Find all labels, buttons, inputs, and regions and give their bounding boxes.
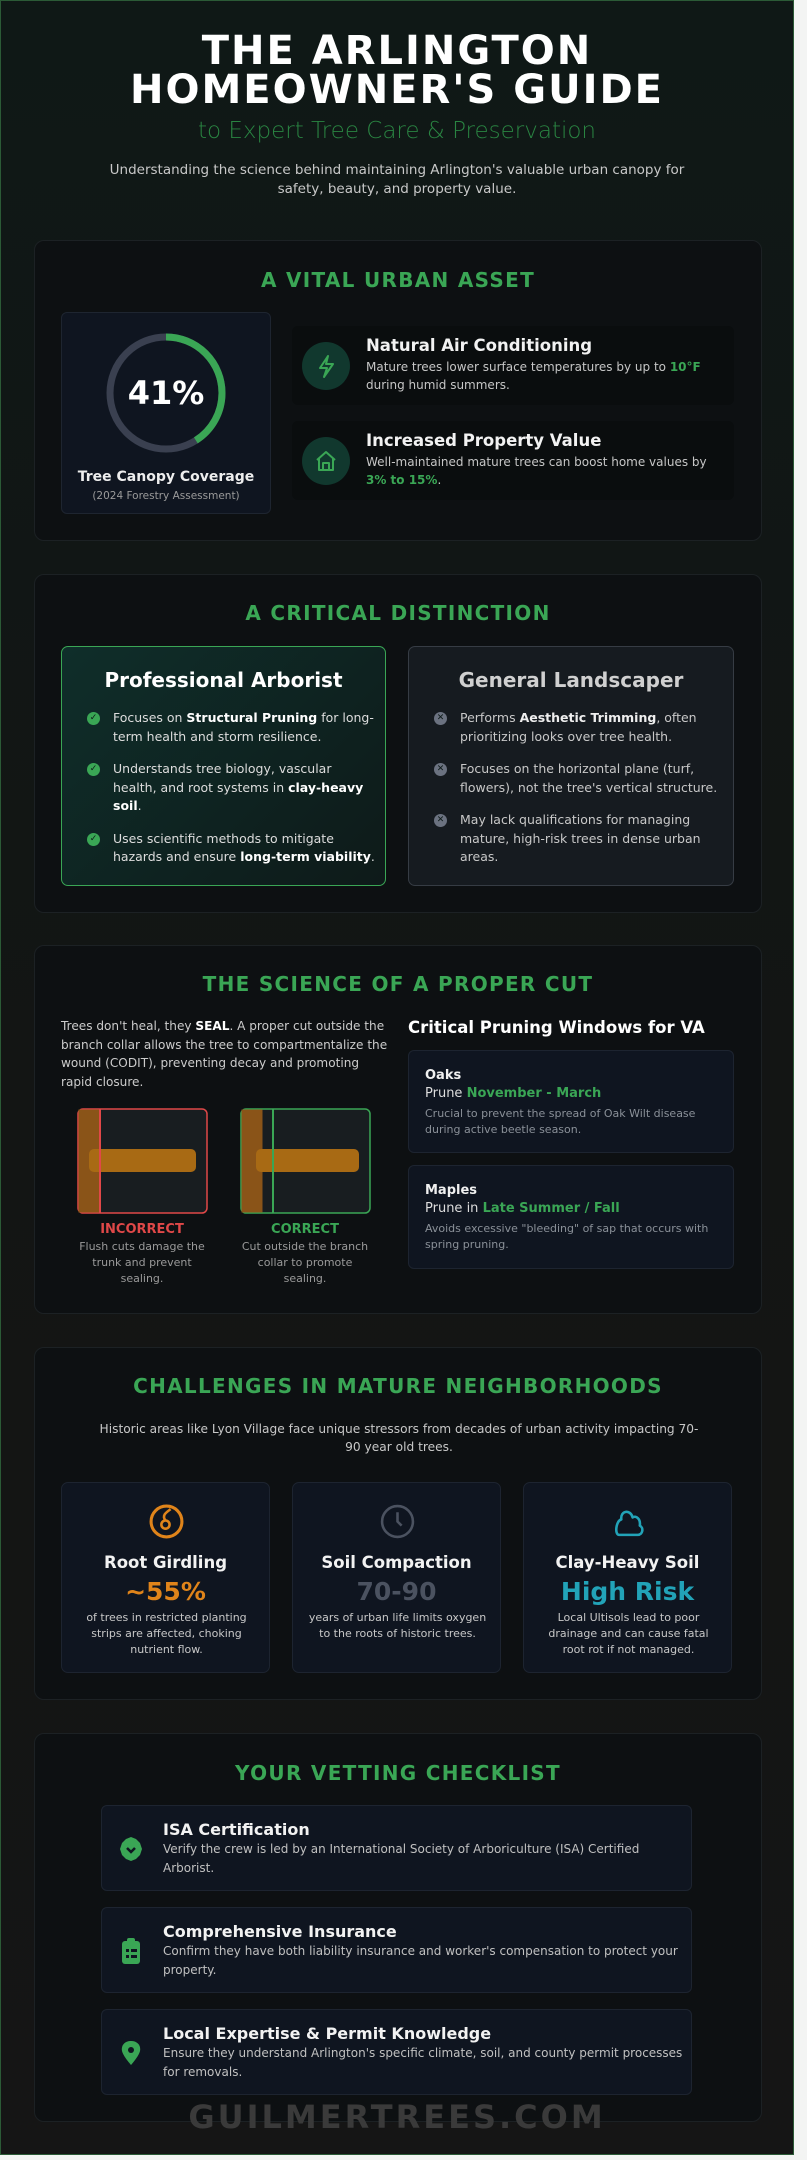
challenge: soil compaction: 70-90 [357, 1577, 436, 1606]
challenge: root girdling [61, 1482, 270, 1673]
box: professional arborist: Professional Arborist [104, 668, 343, 692]
checklist: local expertise: Local Expertise & Permit Knowledge [163, 2024, 491, 2043]
panel: science of a proper cut [34, 945, 762, 1314]
heading: checklist: YOUR VETTING CHECKLIST [235, 1761, 561, 1785]
checklist: ISA certification: ISA Certification [163, 1820, 310, 1839]
watermark: GUILMERTREES.COM [188, 2098, 606, 2136]
box: general landscaper: Focuses on the horizontal plane (turf, flowers), not the tree's vertical structure. [460, 761, 717, 794]
panel: critical distinction [34, 574, 762, 913]
challenge: soil compaction: years of urban life limits oxygen to the roots of historic trees. [309, 1611, 486, 1640]
box: professional arborist [61, 646, 386, 886]
intro text: Understanding the science behind maintaining Arlington's valuable urban canopy for safety, beauty, and property value. [110, 162, 684, 196]
donut chart 41% [106, 334, 226, 452]
challenge: soil compaction [292, 1482, 501, 1673]
canopy label: Tree Canopy Coverage [78, 469, 254, 485]
box: general landscaper: May lack qualifications for managing mature, high-risk trees in dense urban areas. [460, 812, 701, 864]
checklist: insurance: Confirm they have both liability insurance and worker's compensation to protect your property. [163, 1944, 678, 1977]
feature: natural air conditioning: Natural Air Conditioning [366, 336, 592, 355]
canopy coverage stat [61, 312, 271, 514]
challenge: clay soil: High Risk [561, 1577, 694, 1606]
icon: lightning [302, 342, 350, 390]
label: correct: Cut outside the branch collar to promote sealing. [242, 1240, 368, 1285]
heading: vital urban asset: A VITAL URBAN ASSET [261, 268, 535, 292]
canopy label: (2024 Forestry Assessment) [92, 490, 240, 502]
window: maples: Prune in Late Summer / Fall [425, 1201, 620, 1216]
challenge: root girdling: of trees in restricted planting strips are affected, choking nutrient flow. [86, 1611, 247, 1656]
panel: vetting checklist [34, 1733, 762, 2122]
window: oaks [408, 1050, 734, 1153]
diagram: incorrect cut [77, 1108, 208, 1214]
intro: challenges: Historic areas like Lyon Village face unique stressors from decades of urban activity impacting 70-90 year old trees. [100, 1422, 698, 1454]
label: correct: CORRECT [271, 1222, 339, 1237]
box: professional arborist: ✓ [90, 764, 97, 774]
heading: proper cut: THE SCIENCE OF A PROPER CUT [203, 972, 593, 996]
box: professional arborist: ✓ [90, 834, 97, 844]
box: general landscaper: ✕ [437, 815, 444, 825]
challenge: root girdling: Root Girdling [104, 1553, 227, 1572]
box: professional arborist: Understands tree biology, vascular health, and root systems in clay-heavy soil. [113, 761, 363, 813]
challenge: clay soil [523, 1482, 732, 1673]
label: incorrect: INCORRECT [100, 1222, 184, 1237]
box: general landscaper: ✕ [437, 764, 444, 774]
window: oaks: Crucial to prevent the spread of Oak Wilt disease during active beetle season. [425, 1107, 695, 1136]
window: maples: Maples [425, 1183, 477, 1198]
icon: house [302, 437, 350, 485]
icon: root [150, 1504, 184, 1538]
challenge: root girdling: ~55% [125, 1577, 206, 1606]
subtitle: to Expert Tree Care & Preservation [198, 118, 596, 144]
title: HOMEOWNER'S GUIDE [130, 67, 664, 113]
icon: clipboard [122, 1938, 140, 1964]
title [130, 28, 664, 113]
checklist: ISA certification: Verify the crew is led by an International Society of Arboriculture (ISA) Certified Arborist. [163, 1842, 639, 1875]
challenge: clay soil: Local Ultisols lead to poor drainage and can cause fatal root rot if not managed. [548, 1611, 709, 1656]
checklist: local expertise: Ensure they understand Arlington's specific climate, soil, and county permit processes for removals. [163, 2046, 682, 2079]
icon: badge [120, 1837, 142, 1861]
checklist: insurance [101, 1907, 692, 1993]
canopy label [78, 469, 254, 502]
challenge: soil compaction: Soil Compaction [321, 1553, 472, 1572]
window: oaks: Prune November - March [425, 1086, 601, 1101]
feature: natural air conditioning [292, 326, 734, 405]
heading: challenges: CHALLENGES IN MATURE NEIGHBORHOODS [133, 1374, 663, 1398]
feature: property value: Well-maintained mature trees can boost home values by 3% to 15%. [366, 455, 707, 487]
box: general landscaper: General Landscaper [459, 668, 683, 692]
box: professional arborist: ✓ [90, 713, 97, 723]
box: general landscaper [408, 646, 734, 886]
panel: challenges [34, 1347, 762, 1700]
box: professional arborist: Uses scientific methods to mitigate hazards and ensure long-term viability. [113, 830, 375, 864]
panel: vital urban asset [34, 240, 762, 541]
feature: property value [292, 421, 734, 500]
challenge: clay soil: Clay-Heavy Soil [556, 1553, 699, 1572]
diagram: correct cut [240, 1108, 371, 1214]
box: general landscaper: Performs Aesthetic Trimming, often prioritizing looks over tree health. [460, 710, 697, 744]
title: THE ARLINGTON [202, 28, 592, 74]
box: professional arborist: Focuses on Structural Pruning for long-term health and storm resilience. [113, 710, 374, 744]
checklist: local expertise [101, 2009, 692, 2095]
label: incorrect: Flush cuts damage the trunk and prevent sealing. [79, 1240, 205, 1285]
text: seal explanation: rapid closure. [61, 1075, 143, 1089]
icon: map pin [122, 2041, 140, 2065]
text: seal explanation [60, 1019, 387, 1089]
heading: critical distinction: A CRITICAL DISTINCTION [245, 601, 551, 625]
text: seal explanation: Trees don't heal, they SEAL. A proper cut outside the [61, 1019, 384, 1033]
checklist: insurance: Comprehensive Insurance [163, 1922, 397, 1941]
donut chart 41%: 41% [128, 374, 204, 412]
text: seal explanation: branch collar allows the tree to compartmentalize the [61, 1038, 387, 1052]
text: seal explanation: wound (CODIT), preventing decay and promoting [61, 1056, 359, 1070]
window: maples: Avoids excessive "bleeding" of sap that occurs with spring pruning. [425, 1222, 708, 1251]
window: maples [408, 1165, 734, 1269]
window: oaks: Oaks [425, 1068, 461, 1083]
box: general landscaper: ✕ [437, 713, 444, 723]
icon: clock [380, 1504, 414, 1538]
icon: cloud [615, 1510, 644, 1536]
checklist: ISA certification [101, 1805, 692, 1891]
heading: pruning windows: Critical Pruning Windows for VA [408, 1018, 705, 1037]
feature: natural air conditioning: Mature trees lower surface temperatures by up to 10°F during humid summers. [366, 360, 701, 392]
feature: property value: Increased Property Value [366, 431, 601, 450]
